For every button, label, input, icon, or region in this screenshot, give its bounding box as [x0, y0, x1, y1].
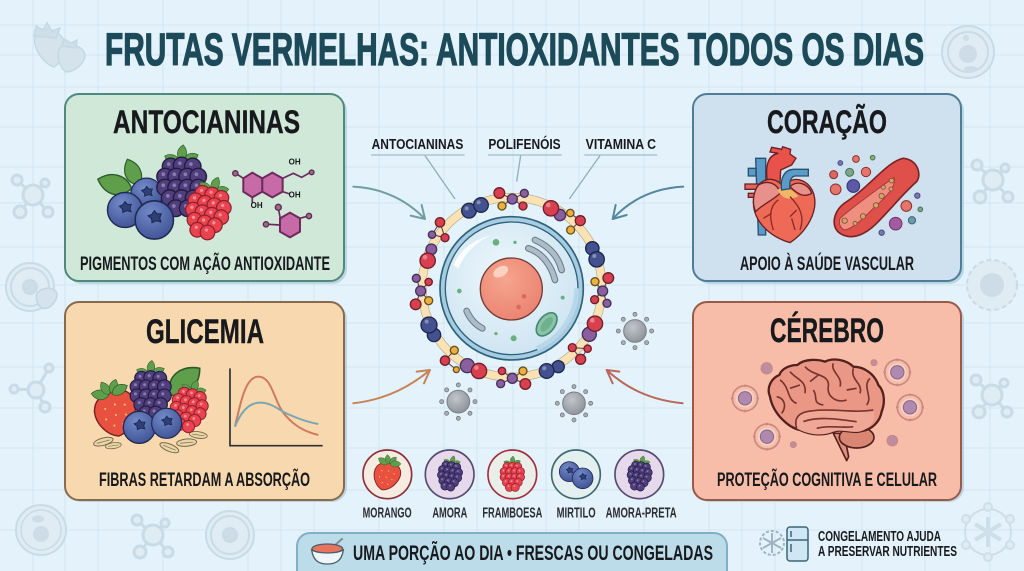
cell body [440, 217, 583, 360]
icon: faded strawberries top left [34, 23, 85, 72]
free radical right [616, 312, 654, 350]
icon: amora-preta [615, 450, 664, 499]
icon: anthocyanin molecule: OH [289, 158, 301, 167]
membrane ring [422, 197, 602, 377]
caption: pigmentos: PIGMENTOS COM AÇÃO ANTIOXIDANTE [80, 253, 330, 275]
free radical bottom right [555, 385, 593, 422]
heading: antocianinas: ANTOCIANINAS [113, 104, 300, 140]
nucleus [480, 258, 542, 320]
panel: coracao [693, 94, 964, 284]
fruit labels: MORANGO [363, 505, 412, 521]
icon: faded molecule left upper [12, 175, 53, 218]
icon: faded cell with strawberry left [6, 263, 57, 311]
caption: apoio: APOIO À SAÚDE VASCULAR [740, 253, 914, 275]
note: freezing: CONGELAMENTO AJUDA [818, 529, 941, 545]
icon: faded molecule left lower [10, 364, 53, 412]
chart: glycemic curves [230, 368, 323, 446]
caption: fibras: FIBRAS RETARDAM A ABSORÇÃO [99, 469, 310, 491]
icon: mixed berries [95, 144, 238, 244]
icon: faded cell bottom left [16, 505, 66, 555]
banner: serving advice [297, 533, 727, 571]
icon: heart [745, 147, 815, 243]
arrow: teal top left [353, 187, 425, 219]
arrow: blue top right [613, 187, 683, 219]
note: freezing: A PRESERVAR NUTRIENTES [818, 544, 957, 560]
icon: morango [363, 450, 412, 499]
fruit row [363, 450, 677, 521]
icon: faded molecule right upper [972, 160, 1013, 203]
icon: anthocyanin molecule: OH [251, 201, 263, 210]
fruit labels: AMORA-PRETA [606, 505, 677, 521]
arrow: red bottom right [607, 370, 683, 403]
organelles [457, 239, 565, 341]
icon: faded molecule bottom [132, 515, 173, 558]
fruit labels: AMORA [432, 505, 467, 521]
icon: berries and oats [87, 359, 214, 455]
icon: brain [769, 360, 884, 461]
icon: faded cell right [967, 260, 1017, 310]
icon: faded cell top right [942, 26, 994, 78]
icon: anthocyanin molecule: OH [289, 190, 301, 199]
icon: bowl [312, 538, 343, 564]
icon: protected particles [731, 358, 924, 451]
labels: compounds: ANTOCIANINAS [372, 137, 463, 153]
panel: cerebro [693, 302, 964, 502]
fruit labels: FRAMBOESA [482, 505, 542, 521]
panel: antocianinas [65, 94, 347, 284]
arrow: orange bottom left [353, 370, 430, 403]
icon: faded snowflake [962, 503, 1014, 561]
icon: blood vessel and particles [830, 155, 923, 237]
note: freezing [818, 529, 957, 560]
icon: faded molecule right lower [971, 375, 1012, 418]
fruit labels: MIRTILO [557, 505, 596, 521]
icon: mirtilo [552, 450, 600, 499]
icon: anthocyanin molecule [233, 158, 314, 237]
banner text: UMA PORÇÃO AO DIA • FRESCAS OU CONGELADAS [353, 542, 713, 565]
icon: amora [425, 450, 474, 499]
antioxidant molecules [410, 188, 614, 389]
center diagram: cell [353, 135, 683, 422]
labels: compounds [371, 135, 657, 199]
panel: glicemia [65, 302, 347, 502]
free radical bottom left [440, 383, 477, 420]
heading: cerebro: CÉREBRO [770, 312, 884, 350]
fruit labels [363, 505, 677, 521]
icon: fridge [787, 527, 808, 561]
labels: compounds: POLIFENÓIS [488, 135, 561, 153]
labels: compounds: VITAMINA C [586, 137, 656, 153]
icon: faded cell bottom [206, 511, 254, 559]
heading: glicemia: GLICEMIA [146, 313, 264, 351]
heading: coracao: CORAÇÃO [767, 104, 887, 140]
icon: snowflake [760, 531, 784, 555]
icon: framboesa [488, 450, 537, 499]
